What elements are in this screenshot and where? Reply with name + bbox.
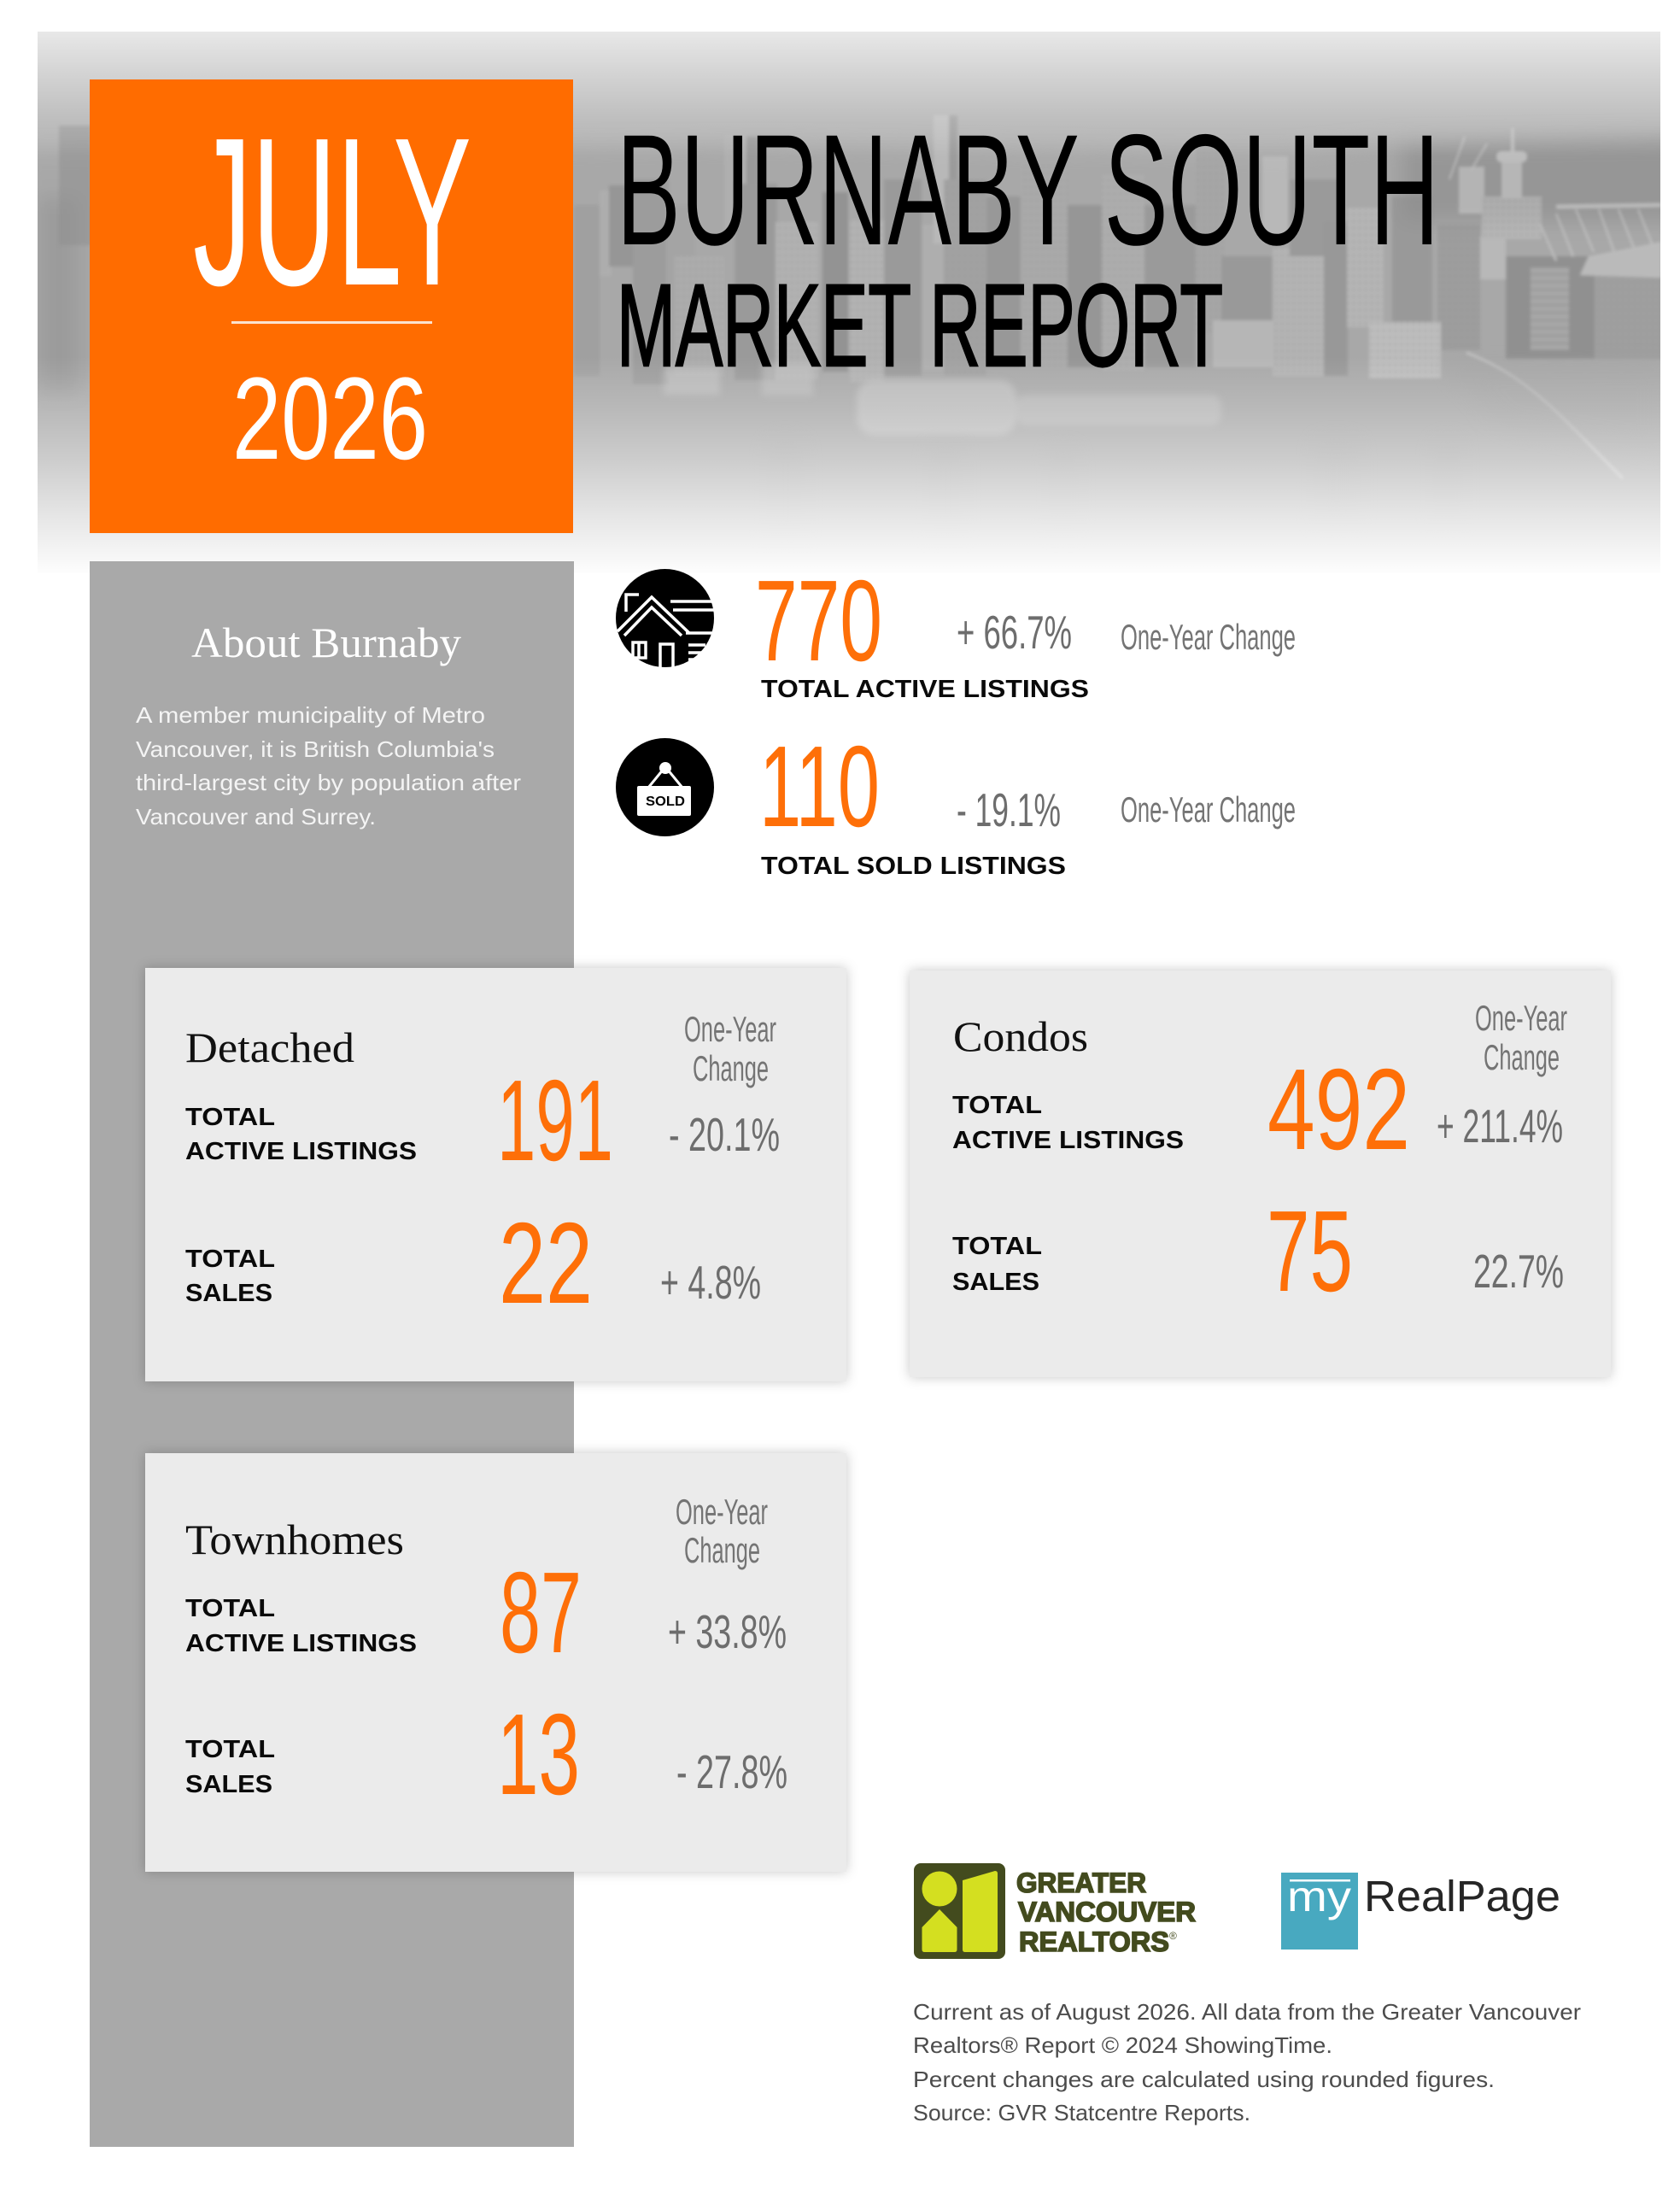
active listings label: ACTIVE LISTINGS [185,1138,417,1165]
month: JULY [193,94,471,330]
change caption: Change [1484,1037,1560,1077]
heading: Detached [185,1023,354,1071]
sales label [185,1736,275,1798]
sales label: TOTAL [185,1736,275,1763]
one-year change caption: One-Year Change [1121,789,1296,830]
active listings label: TOTAL [185,1595,275,1622]
header background: misty city skyline photo [17,32,1680,598]
stat: total active listings value: 770 [755,556,882,685]
active listings change: - 20.1% [669,1108,780,1161]
year: 2026 [232,354,428,484]
footer source note: Realtors® Report © 2024 ShowingTime. [913,2032,1332,2058]
heading: Townhomes [185,1516,404,1563]
footer source note: Source: GVR Statcentre Reports. [913,2100,1250,2125]
active listings label [952,1092,1184,1154]
about text block: A member municipality of Metro [136,702,485,728]
stat: total sold listings value: 110 [759,722,880,851]
active listings label: ACTIVE LISTINGS [952,1127,1184,1154]
sales label: SALES [185,1280,272,1307]
stat label: TOTAL ACTIVE LISTINGS [761,676,1089,703]
sales label: TOTAL [185,1246,275,1273]
about text block: third-largest city by population after [136,770,521,795]
one-year change caption: One-Year Change [1121,617,1296,657]
sales label [185,1246,275,1307]
sales label: SALES [952,1269,1039,1296]
active listings value: 87 [500,1548,582,1677]
icon: house [616,569,714,667]
sales value: 22 [499,1199,593,1328]
logo: Greater Vancouver Realtors: GREATER [1016,1867,1146,1898]
stat change: + 66.7% [957,606,1072,659]
icon: sold sign [616,738,714,836]
logo: Greater Vancouver Realtors: ® [1169,1930,1177,1942]
subtitle: Market Report: MARKET REPORT [617,261,1223,391]
active listings label: ACTIVE LISTINGS [185,1630,417,1657]
sales label: TOTAL [952,1233,1042,1260]
active listings label [185,1595,417,1657]
logo: Greater Vancouver Realtors: VANCOUVER [1018,1897,1196,1927]
active listings value: 492 [1267,1045,1410,1174]
stat label: TOTAL SOLD LISTINGS [761,853,1066,880]
about heading: About Burnaby [191,619,461,666]
active listings label: TOTAL [185,1104,275,1131]
footer source note: Percent changes are calculated using rounded figures. [913,2067,1495,2092]
change caption [684,1009,776,1088]
change caption: One-Year [676,1492,768,1532]
active listings label: TOTAL [952,1092,1042,1119]
about text block [136,702,521,830]
date panel: orange month and year block [90,79,573,533]
about text block: Vancouver, it is British Columbia's [136,736,495,762]
panel: townhomes [145,1453,846,1872]
change caption: Change [693,1048,769,1088]
change caption: Change [684,1530,760,1570]
panel: detached [145,968,846,1381]
sales change: - 27.8% [676,1745,787,1798]
panel: condos [910,970,1611,1377]
change caption [676,1492,768,1570]
logo: Greater Vancouver Realtors: REALTORS [1019,1926,1169,1957]
sales value: 75 [1267,1187,1353,1316]
sales value: 13 [497,1690,580,1819]
logo: myRealPage: RealPage [1364,1872,1560,1920]
sales change: + 4.8% [660,1256,761,1309]
change caption: One-Year [1475,998,1567,1038]
sales change: 22.7% [1473,1245,1564,1298]
heading: Condos [953,1012,1088,1060]
change caption [1475,998,1567,1077]
active listings label [185,1104,417,1165]
sales label: SALES [185,1771,272,1798]
stat change: - 19.1% [957,783,1061,836]
footer source note [913,1999,1581,2125]
logo: myRealPage [1281,1872,1560,1950]
sales label [952,1233,1042,1296]
logo: myRealPage: my [1287,1873,1351,1920]
active listings value: 191 [497,1056,613,1185]
about text block: Vancouver and Surrey. [136,804,376,830]
icon: sold sign: SOLD [646,794,685,809]
change caption: One-Year [684,1009,776,1049]
logo: Greater Vancouver Realtors [914,1863,1196,1959]
active listings change: + 33.8% [668,1605,787,1658]
footer source note: Current as of August 2026. All data from the Greater Vancouver [913,1999,1581,2025]
panel: grey sidebar [90,561,574,2147]
divider [231,321,432,324]
active listings change: + 211.4% [1437,1099,1563,1152]
